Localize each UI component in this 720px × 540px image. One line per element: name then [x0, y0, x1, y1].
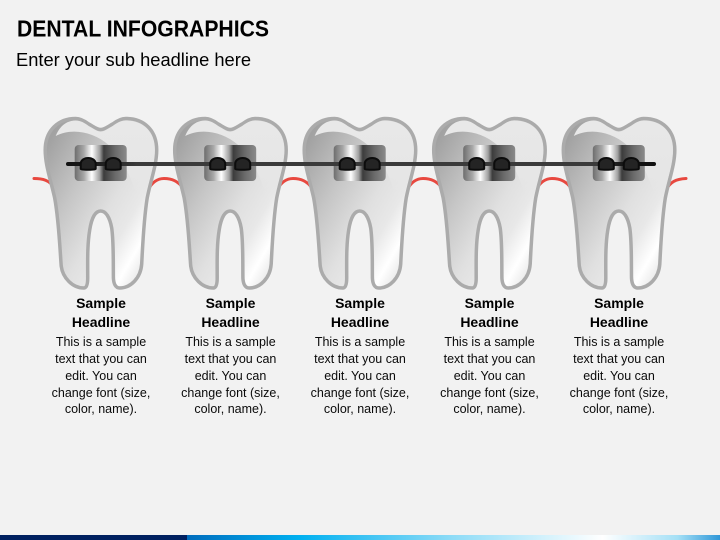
text block 1 — [52, 295, 150, 416]
text block 2 — [181, 295, 280, 416]
text block 1: This is a sample — [56, 335, 146, 349]
text block 3: edit. You can — [324, 369, 396, 383]
text block 4: Sample — [465, 295, 515, 311]
text block 1: change font (size, — [52, 386, 150, 400]
text block 5: edit. You can — [583, 369, 655, 383]
text block 4: color, name). — [453, 402, 526, 416]
text block 1: text that you can — [55, 352, 147, 366]
text block 3: color, name). — [324, 402, 396, 416]
text block 5: This is a sample — [574, 335, 664, 349]
text block 5: text that you can — [573, 352, 665, 366]
tooth 4 — [434, 118, 545, 288]
text block 2: text that you can — [185, 352, 276, 366]
text block 3: text that you can — [314, 352, 406, 366]
tooth 1 — [45, 118, 157, 288]
text block 1: Headline — [72, 314, 130, 330]
text block 1: edit. You can — [65, 369, 137, 383]
tooth 5 — [563, 118, 675, 288]
tooth 3 — [304, 118, 416, 288]
text block 5: change font (size, — [570, 386, 668, 400]
bracket clips — [81, 158, 639, 170]
text block 4: change font (size, — [440, 386, 539, 400]
text block 2: color, name). — [194, 402, 267, 416]
text block 5: color, name). — [583, 402, 655, 416]
subtitle: Enter your sub headline here — [16, 50, 251, 70]
text block 5: Sample — [594, 295, 644, 311]
text block 4: edit. You can — [454, 369, 525, 383]
text block 3 — [311, 295, 409, 416]
text block 4: text that you can — [444, 352, 535, 366]
text block 2: Sample — [206, 295, 256, 311]
text block 4: This is a sample — [444, 335, 535, 349]
braces wire — [66, 162, 656, 166]
text block 2: change font (size, — [181, 386, 280, 400]
text block 1: Sample — [76, 295, 126, 311]
text block 4: Headline — [460, 314, 519, 330]
text block 5: Headline — [590, 314, 648, 330]
text block 3: change font (size, — [311, 386, 409, 400]
text block 5 — [570, 295, 668, 416]
text block 4 — [440, 295, 539, 416]
footer bar — [0, 535, 720, 540]
title: DENTAL INFOGRAPHICS — [17, 16, 269, 42]
text block 3: This is a sample — [315, 335, 405, 349]
gum line — [34, 178, 686, 190]
text block 3: Headline — [331, 314, 389, 330]
text block 1: color, name). — [65, 402, 137, 416]
text block 2: This is a sample — [185, 335, 276, 349]
text block 3: Sample — [335, 295, 385, 311]
tooth 2 — [175, 118, 286, 288]
text block 2: edit. You can — [195, 369, 266, 383]
text block 2: Headline — [201, 314, 260, 330]
